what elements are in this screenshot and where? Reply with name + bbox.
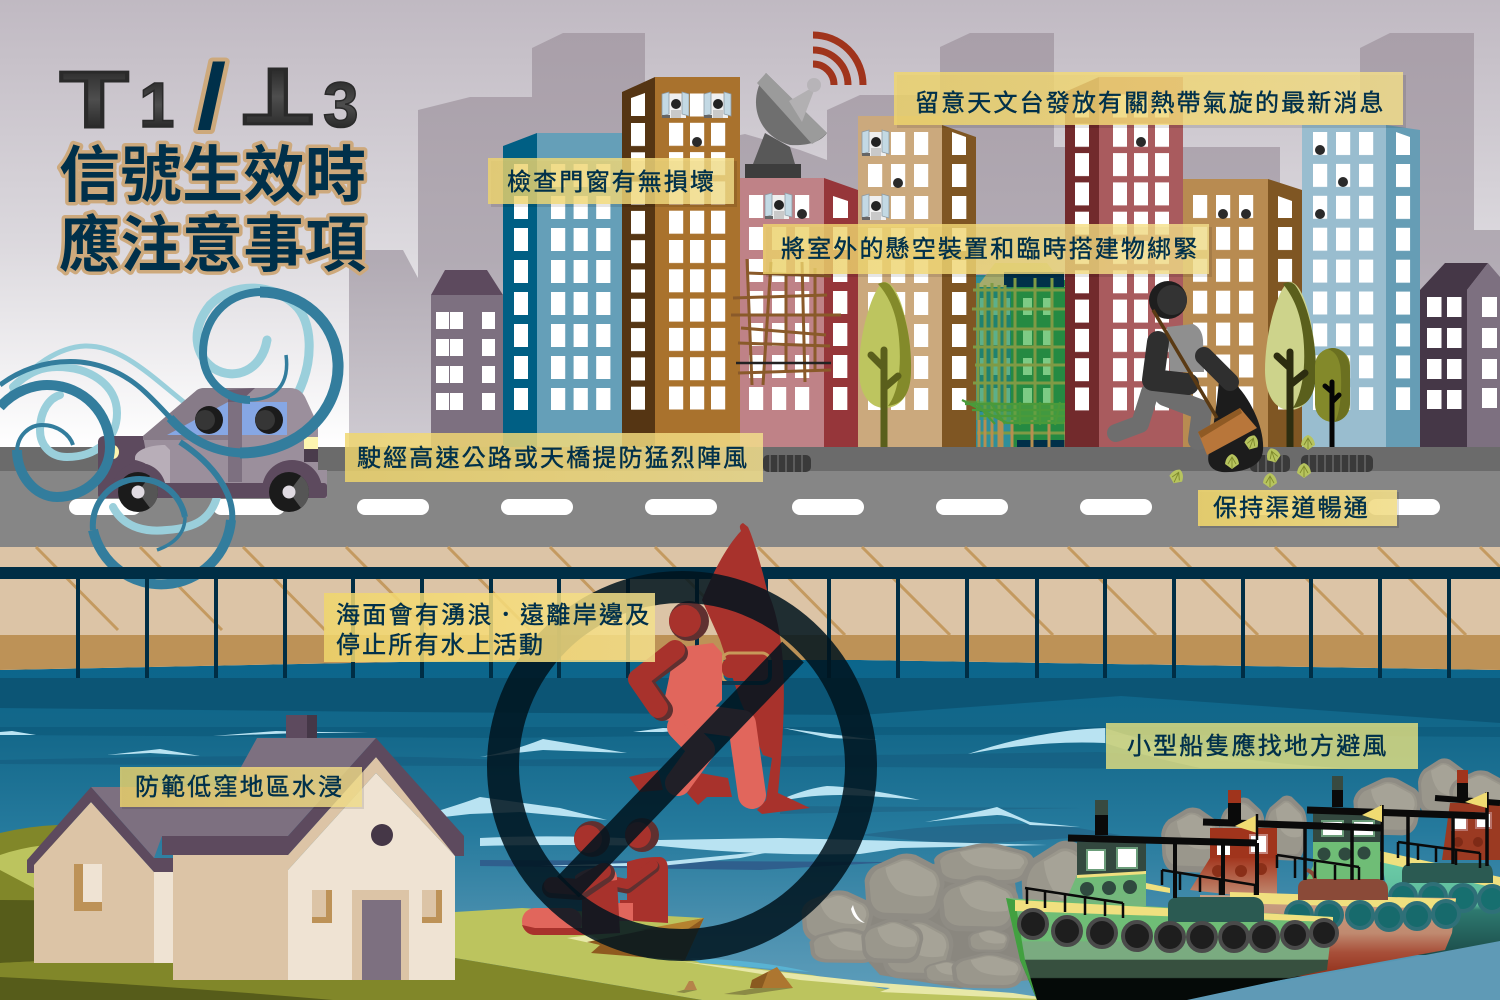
sand cliff xyxy=(587,918,704,960)
building: red tower xyxy=(1065,77,1183,447)
tree A xyxy=(859,282,911,448)
boat 4: red, far right xyxy=(1435,770,1500,860)
house xyxy=(27,715,464,980)
small rocks xyxy=(676,967,793,995)
signal symbol T1: 1 xyxy=(139,69,175,141)
red lifeboat xyxy=(1298,879,1388,900)
house windows and door xyxy=(74,824,442,980)
label: flooding xyxy=(120,767,364,809)
drains xyxy=(763,455,1373,472)
legs xyxy=(678,727,702,783)
arm xyxy=(640,653,677,710)
boat 2 fenders xyxy=(1286,901,1459,930)
building: scaffolded green tower xyxy=(962,263,1077,456)
label: Observatory news: 留意天文台發放有關熱帶氣旋的最新消息 xyxy=(915,90,1386,117)
tree C xyxy=(1315,348,1350,448)
label: check doors and windows xyxy=(488,158,737,207)
bamboo scaffold xyxy=(962,278,1077,456)
no-entry sign xyxy=(503,587,861,945)
label: small vessels xyxy=(1106,723,1418,769)
broom head xyxy=(1198,408,1257,455)
building: light blue tower xyxy=(1302,125,1420,447)
sea xyxy=(0,660,1500,1000)
label: keep drains clear: 保持渠道暢通 xyxy=(1213,495,1370,522)
wave crests xyxy=(0,728,1342,876)
boat 1: green, front xyxy=(1006,800,1337,1000)
building: beige tower xyxy=(858,116,976,447)
sail xyxy=(702,523,810,814)
torso xyxy=(660,643,722,722)
swirling wind, dark strokes xyxy=(0,292,338,584)
lifeboat xyxy=(1402,863,1493,883)
fence xyxy=(0,567,1500,678)
road dashes xyxy=(69,499,1440,515)
signal symbol T1 xyxy=(60,55,175,144)
label: check doors and windows: 檢查門窗有無損壞 xyxy=(507,169,716,196)
head xyxy=(669,601,709,641)
signal symbol T3 xyxy=(244,52,359,141)
hull xyxy=(1006,898,1333,1000)
label: secure outdoor fixtures: 將室外的懸空裝置和臨時搭建物綁緊 xyxy=(781,236,1199,263)
icon: people in windows xyxy=(862,130,903,220)
sweeping worker xyxy=(1116,281,1315,488)
windsurfer xyxy=(629,523,810,814)
bamboo tied over pink tower xyxy=(731,259,841,385)
car xyxy=(98,388,327,512)
promenade xyxy=(0,547,1500,670)
label: flooding: 防範低窪地區水浸 xyxy=(135,774,344,801)
label: stay away from shore: 海面會有湧浪．遠離岸邊及 xyxy=(336,602,652,629)
water over hull xyxy=(1187,941,1500,1000)
signal symbol T1: T xyxy=(60,55,128,144)
label: keep drains clear xyxy=(1198,490,1399,528)
building: small purple house right xyxy=(1420,263,1500,447)
boat 2: red, centre xyxy=(1190,790,1459,990)
building: pink tower xyxy=(740,178,858,447)
icon: satellite dish with signal xyxy=(745,35,863,178)
building: small purple house left xyxy=(431,270,503,447)
building: tan tower xyxy=(1183,179,1302,447)
title text: 信號生效時 xyxy=(59,141,367,209)
road xyxy=(0,447,1500,547)
person behind xyxy=(617,818,668,923)
boat 3: green, right xyxy=(1296,776,1500,955)
tree B xyxy=(1265,282,1316,448)
swirling wind, light strokes behind car xyxy=(10,288,309,531)
shore foam xyxy=(640,957,1060,1000)
hills and ground xyxy=(0,825,1060,1000)
signal symbol T3: 3 xyxy=(323,69,359,141)
two people sitting on shore xyxy=(522,818,668,935)
background city silhouettes xyxy=(349,33,1500,447)
label: small vessels: 小型船隻應找地方避風 xyxy=(1127,733,1388,760)
lifeboat xyxy=(1168,897,1264,922)
icon: people in windows xyxy=(662,92,731,147)
boom xyxy=(722,653,770,683)
label: highway gusts: 駛經高速公路或天橋提防猛烈陣風 xyxy=(357,445,749,472)
darker wave bands xyxy=(0,678,1500,870)
label: stay away from shore xyxy=(324,593,655,662)
breakwater rocks xyxy=(801,758,1500,988)
tyres xyxy=(1019,910,1337,951)
leaves xyxy=(1167,433,1315,488)
boat 3 fenders xyxy=(1390,884,1500,912)
signal symbol T3: T xyxy=(244,52,312,141)
title: 應注意事項 xyxy=(59,211,367,279)
icon: people in windows xyxy=(765,193,807,219)
title xyxy=(59,45,367,279)
slash: / xyxy=(197,45,226,148)
building: blue tower xyxy=(503,133,622,447)
label: highway gusts xyxy=(345,433,763,482)
person in front xyxy=(522,821,620,935)
rubbish bag xyxy=(1208,372,1263,472)
fins xyxy=(629,770,663,792)
label: secure outdoor fixtures xyxy=(763,224,1212,277)
label: Observatory news xyxy=(894,72,1406,128)
label: stay away from shore: 停止所有水上活動 xyxy=(336,632,545,659)
background sky xyxy=(0,0,1500,448)
building: brown tower with open shutters xyxy=(622,77,740,447)
chimney xyxy=(286,715,317,738)
